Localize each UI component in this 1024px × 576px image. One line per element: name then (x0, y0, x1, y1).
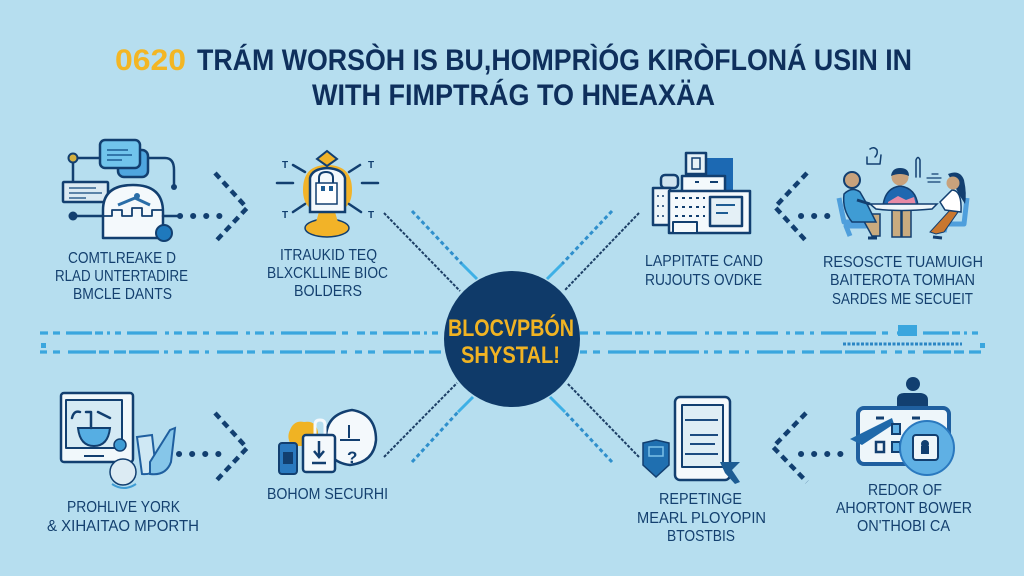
icon: people at table (839, 148, 967, 238)
label: block 5: PROHLIVE YORK (67, 499, 180, 516)
label: block 4: BAITEROTA TOMHAN (830, 272, 975, 289)
label: block 8: ON'THOBI CA (857, 518, 950, 535)
label: block 1 (55, 250, 188, 303)
left person (860, 214, 880, 236)
label: block 7: REPETINGE (659, 491, 742, 508)
label: block 3: RUJOUTS OVDKE (645, 272, 762, 289)
horizontal dashed connector lines (40, 325, 985, 352)
arrow: chevron connector 1 (180, 173, 247, 242)
icon: security padlock group (279, 410, 376, 474)
icon: document cards (653, 153, 750, 233)
label: block 7: MEARL PLOYOPIN (637, 510, 766, 527)
icon: yellow lock badge: T (368, 160, 374, 171)
label: block 5 (47, 499, 199, 535)
icon: monitor and glass (61, 393, 175, 488)
label: block 4: SARDES ME SECUEIT (832, 291, 973, 308)
arrow: chevron connector 5 (179, 413, 247, 482)
label: block 1: BMCLE DANTS (73, 286, 172, 303)
arrow: chevron connector 3 (775, 173, 840, 242)
icon: yellow lock badge: T (368, 210, 374, 221)
title: 0620 (115, 44, 186, 77)
diagonal connector lines (384, 211, 639, 462)
label: block 2: BOLDERS (294, 283, 362, 300)
center person (892, 208, 911, 237)
right chair (944, 198, 967, 232)
label: block 4: RESOSCTE TUAMUIGH (823, 254, 983, 271)
label: block 4 (823, 254, 983, 308)
label: block 3 (645, 253, 763, 289)
label: block 6: BOHOM SECURHI (267, 486, 388, 503)
table (870, 204, 937, 210)
label: block 5: & XIHAITAO MPORTH (47, 518, 199, 535)
central hub circle: BLOCVPBÓN (448, 314, 574, 342)
icon: security padlock group: ? (347, 448, 357, 467)
title: TRÁM WORSÒH IS BU,HOMPRÌÓG KIRÒFLONÁ USIN IN (197, 43, 912, 77)
central hub circle: SHYSTAL! (461, 342, 560, 369)
label: block 7 (637, 491, 766, 545)
label: block 8: AHORTONT BOWER (836, 500, 972, 517)
label: block 7: BTOSTBIS (667, 528, 735, 545)
icon: board with person and seal (850, 377, 954, 475)
label: block 2: BLXCKLLINE BIOC (267, 265, 388, 282)
icon: yellow lock badge: T (282, 160, 288, 171)
label: block 1: RLAD UNTERTADIRE (55, 268, 188, 285)
arrow: chevron connector 7 (773, 413, 842, 482)
label: block 2 (267, 247, 388, 300)
icon: network chat dome (63, 140, 180, 241)
icon: yellow lock badge (277, 151, 378, 237)
label: block 8: REDOR OF (868, 482, 942, 499)
right person (930, 210, 958, 234)
central hub circle (444, 271, 580, 407)
label: block 2: ITRAUKID TEQ (280, 247, 377, 264)
icon: yellow lock badge: T (282, 210, 288, 221)
label: block 8 (836, 482, 972, 535)
label: block 1: COMTLREAKE D (68, 250, 176, 267)
title (115, 43, 912, 112)
title: WITH FIMPTRÁG TO HNEAXÄA (312, 78, 715, 112)
label: block 3: LAPPITATE CAND (645, 253, 763, 270)
icon: tablet and shield (643, 397, 740, 484)
small floating glyphs (867, 148, 881, 164)
left chair (839, 198, 866, 236)
